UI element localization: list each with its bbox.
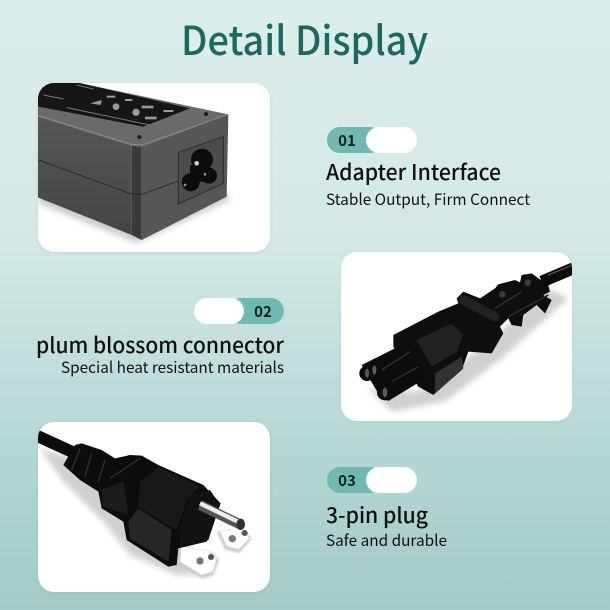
- badge 03: 03: [338, 470, 356, 491]
- badge 02: [194, 298, 284, 324]
- badge 02: 02: [254, 301, 272, 322]
- text: safe and durable: Safe and durable: [326, 529, 447, 551]
- icon: C5 plum blossom connector: [359, 265, 575, 412]
- text: special materials: Special heat resistant materials: [61, 356, 284, 378]
- panel: adapter photo: [33, 82, 270, 253]
- badge 01: [327, 127, 417, 153]
- badge 01: 01: [338, 130, 356, 151]
- heading: 3-pin plug: 3-pin plug: [326, 499, 429, 530]
- title: Detail Display: [181, 9, 428, 67]
- heading: plum blossom connector: plum blossom connector: [36, 329, 284, 360]
- callout 01: adapter interface: [326, 127, 530, 210]
- callout 03: 3-pin plug: [326, 467, 447, 551]
- icon: 3-pin US plug: [37, 436, 252, 578]
- panel: 3-pin plug photo: [37, 422, 270, 593]
- panel: plum blossom connector photo: [341, 252, 575, 422]
- callout 02: plum blossom connector: [36, 298, 284, 378]
- heading: adapter interface: Adapter Interface: [326, 156, 501, 187]
- icon: power adapter brick: [33, 82, 230, 243]
- text: stable output: Stable Output, Firm Connect: [326, 188, 530, 210]
